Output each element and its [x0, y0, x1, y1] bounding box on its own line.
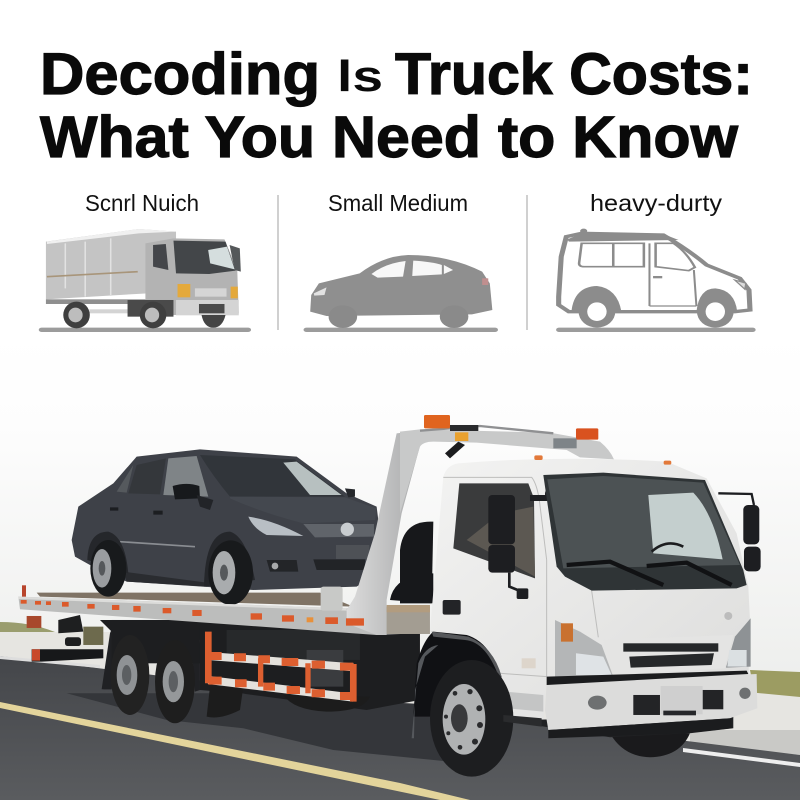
gantry: [400, 415, 614, 513]
vehicle icons: [39, 229, 756, 332]
deck surface: [37, 593, 353, 607]
bumper: [545, 671, 757, 738]
mirrors: [488, 487, 761, 599]
tow truck illustration: [18, 415, 761, 777]
icon: van outline: [556, 229, 756, 332]
wheel arch: [413, 632, 505, 717]
truck cab: [400, 415, 761, 777]
title: What You Need to Know: [40, 105, 739, 170]
category labels: heavy-durty: [590, 190, 723, 216]
title: [40, 42, 753, 170]
icon: box truck: [39, 229, 251, 332]
shadow: [67, 693, 467, 763]
cab step: [503, 715, 542, 727]
scene background: roadside: [0, 622, 800, 755]
rear wheels: [111, 635, 370, 723]
front wheel: [430, 660, 513, 777]
side guard: [208, 632, 353, 702]
scene background: sky: [0, 334, 800, 704]
headlights: [555, 620, 613, 677]
under cab: [513, 717, 733, 737]
lower door panel: [505, 692, 543, 712]
underframe: [27, 615, 420, 710]
grille: [603, 635, 733, 675]
road: [0, 656, 800, 800]
hoses: [390, 573, 433, 603]
car on flatbed: [72, 449, 378, 605]
cab body: [430, 459, 751, 722]
title: Truck Costs:: [395, 42, 753, 107]
hydraulic lines: [400, 522, 433, 603]
roof markers: [534, 455, 543, 460]
deck end marker: [346, 618, 364, 626]
flatbed deck: [18, 585, 420, 635]
icon: sedan silhouette: [304, 255, 498, 332]
windshield: [543, 473, 747, 591]
title: ls: [337, 52, 383, 101]
category labels: [85, 190, 723, 216]
boom upright: [347, 431, 421, 635]
side window: [453, 483, 535, 578]
front wheel right: [610, 733, 690, 757]
door handle: [443, 600, 461, 615]
category labels: Scnrl Nuich: [85, 190, 199, 216]
rear of truck and car: [18, 431, 467, 763]
title: Decoding: [40, 42, 320, 107]
door seams: [443, 477, 598, 677]
category labels: Small Medium: [328, 190, 468, 216]
